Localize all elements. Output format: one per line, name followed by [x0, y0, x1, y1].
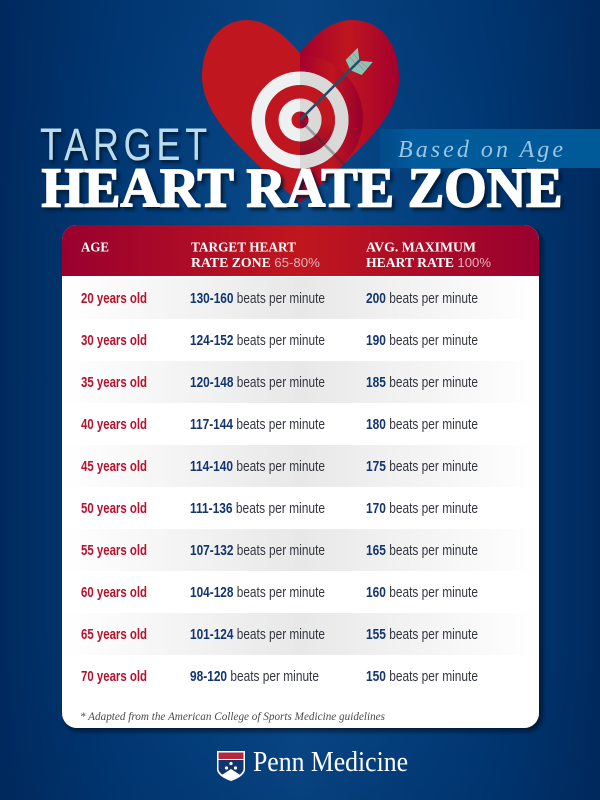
row: 35 years: [62, 361, 539, 403]
row: 20 years: [62, 277, 539, 319]
icon: Penn shield: [217, 751, 245, 781]
footnote: * Adapted from the American College of Sports Medicine guidelines: [80, 711, 385, 723]
row: 65 years: 65 years old: [81, 627, 147, 643]
arrow: [300, 48, 373, 120]
row: 20 years: 200 beats per minute: [366, 291, 478, 307]
heart right half: [300, 20, 399, 203]
arrow shadow: [300, 120, 345, 165]
row: 30 years: [81, 333, 478, 349]
row: 45 years: [62, 445, 539, 487]
row: 55 years: 107-132 beats per minute: [190, 543, 325, 559]
table header: AVG. MAXIMUM: [366, 240, 476, 254]
table header: AGE: [81, 240, 109, 254]
row: 20 years: 20 years old: [81, 291, 147, 307]
wordmark: Penn Medicine: [253, 747, 408, 778]
shaded disc behind target: [328, 62, 363, 168]
banner: based on age: [380, 129, 600, 168]
row: 70 years: 150 beats per minute: [366, 669, 478, 685]
table header: HEART RATE 100%: [366, 255, 491, 270]
row: 70 years: [81, 669, 478, 685]
row: 40 years: 40 years old: [81, 417, 147, 433]
row: 50 years: 50 years old: [81, 501, 147, 517]
row: 50 years: 170 beats per minute: [366, 501, 478, 517]
row: 30 years: 190 beats per minute: [366, 333, 478, 349]
row: 55 years: [62, 529, 539, 571]
row: 45 years: 45 years old: [81, 459, 147, 475]
heart left half: [202, 20, 300, 203]
table header: RATE ZONE 65-80%: [191, 255, 320, 270]
logo: Penn Medicine: [217, 747, 408, 781]
row: 60 years: 104-128 beats per minute: [190, 585, 325, 601]
row: 50 years: 111-136 beats per minute: [190, 501, 325, 517]
row: 60 years: 60 years old: [81, 585, 147, 601]
row: 35 years: 120-148 beats per minute: [190, 375, 325, 391]
panel: heart rate table: [62, 225, 539, 728]
table header: TARGET HEART: [191, 240, 296, 254]
banner: based on age: Based on Age: [398, 137, 563, 163]
row: 70 years: 70 years old: [81, 669, 147, 685]
row: 30 years: 30 years old: [81, 333, 147, 349]
row: 55 years: 165 beats per minute: [366, 543, 478, 559]
row: 45 years: 175 beats per minute: [366, 459, 478, 475]
row: 60 years: [81, 585, 478, 601]
title: heart rate zone: HEART RATE ZONE: [42, 158, 562, 220]
card background: [62, 225, 539, 728]
row: 40 years: [81, 417, 478, 433]
row: 20 years: 130-160 beats per minute: [190, 291, 325, 307]
row: 35 years: 35 years old: [81, 375, 147, 391]
row: 40 years: 180 beats per minute: [366, 417, 478, 433]
row: 55 years: 55 years old: [81, 543, 147, 559]
title: target: TARGET: [40, 119, 207, 170]
row: 60 years: 160 beats per minute: [366, 585, 478, 601]
row: 65 years: [62, 613, 539, 655]
row: 40 years: 117-144 beats per minute: [190, 417, 325, 433]
target rings: [252, 72, 348, 168]
row: 50 years: [81, 501, 478, 517]
icon: heart with target and arrow: [202, 20, 399, 203]
row: 35 years: 185 beats per minute: [366, 375, 478, 391]
row: 70 years: 98-120 beats per minute: [190, 669, 319, 685]
row: 45 years: 114-140 beats per minute: [190, 459, 325, 475]
row: 65 years: 155 beats per minute: [366, 627, 478, 643]
table header: [62, 225, 539, 276]
row: 65 years: 101-124 beats per minute: [190, 627, 325, 643]
row: 30 years: 124-152 beats per minute: [190, 333, 325, 349]
